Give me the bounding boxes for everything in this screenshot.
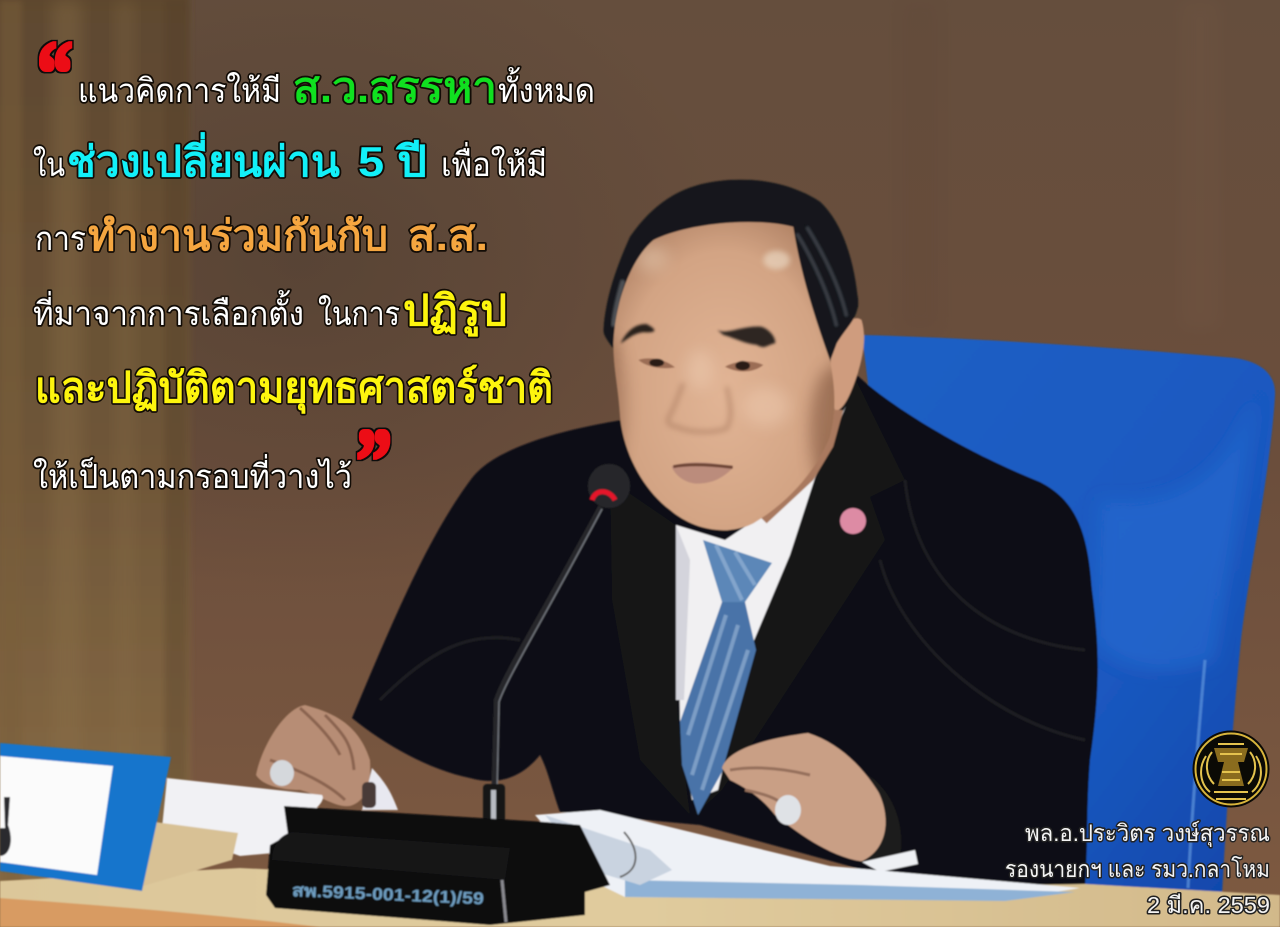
shirt — [676, 406, 846, 800]
necktie — [680, 540, 772, 815]
right hand — [722, 733, 918, 872]
line 4 — [33, 287, 507, 337]
lapel pin — [840, 508, 866, 534]
mouth — [672, 462, 733, 484]
line 2 — [33, 132, 547, 185]
neck and jowl — [747, 410, 843, 523]
line 2: ช่วงเปลี่ยนผ่าน — [67, 132, 340, 185]
line 4: ในการ — [318, 295, 400, 332]
line 1: แนวคิดการให้มี — [78, 72, 281, 109]
line 6: ให้เป็นตามกรอบที่วางไว้ — [33, 454, 352, 495]
wooden block — [143, 822, 238, 886]
blue chair — [862, 335, 1275, 895]
eyes — [638, 358, 675, 368]
desk — [0, 868, 1280, 927]
line 3: ทำงานร่วมกันกับ — [88, 212, 388, 259]
left hand — [256, 705, 398, 810]
eyebrows — [621, 324, 654, 343]
line 4: ที่มาจากการเลือกตั้ง — [33, 290, 304, 332]
line 3 — [35, 212, 488, 259]
emblem seal — [1192, 730, 1270, 808]
line 2: ใน — [33, 146, 65, 183]
line 3: การ — [35, 220, 86, 257]
nose shadow — [668, 383, 731, 432]
papers and binder — [535, 810, 1080, 901]
base label: สพ.5915-001-12(1)/59 — [292, 881, 484, 908]
line 1: ทั้งหมด — [498, 67, 595, 109]
closing quote mark: ” — [356, 410, 392, 512]
name plate — [0, 743, 171, 891]
face — [613, 222, 834, 530]
paper roll — [162, 778, 323, 856]
line 5: และปฏิบัติตามยุทธศาสตร์ชาติ — [35, 364, 553, 414]
line 3: ส.ส. — [408, 212, 488, 259]
caption: name, title, date — [1005, 820, 1270, 918]
line 1 — [78, 64, 595, 111]
hair — [603, 180, 858, 370]
microphone base — [266, 806, 610, 925]
line 2: 5 ปี — [358, 138, 427, 185]
jacket — [352, 370, 1098, 886]
head — [593, 180, 864, 530]
ear — [830, 318, 864, 412]
line 1: ส.ว.สรรหา — [293, 64, 497, 111]
line 2: เพื่อให้มี — [441, 142, 547, 183]
quote text block — [33, 22, 595, 512]
caption: name, title, date: พล.อ.ประวิตร วงษ์สุวรรณ — [1025, 820, 1270, 847]
caption: name, title, date: 2 มี.ค. 2559 — [1147, 892, 1270, 918]
microphone — [483, 464, 630, 842]
line 4: ปฏิรูป — [403, 287, 507, 337]
opening quote mark: “ — [37, 22, 73, 124]
